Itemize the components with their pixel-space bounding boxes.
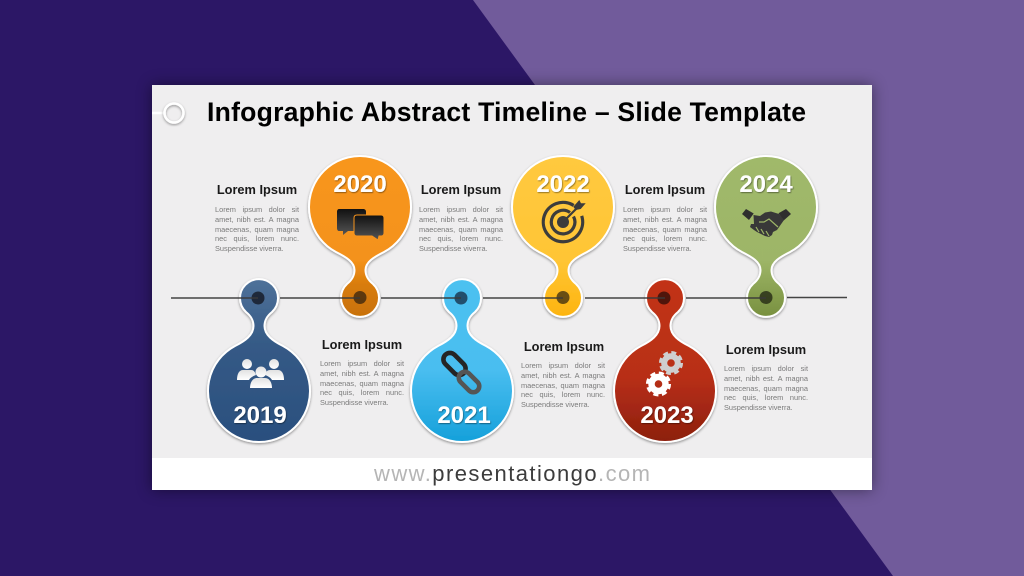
text block: 2020: maecenas, quam magna — [215, 225, 299, 234]
icon: target — [543, 200, 586, 242]
text block: 2022: amet, nibh est. A magna — [419, 215, 503, 224]
text block: 2024: nec quis, lorem nunc. — [623, 234, 707, 243]
text block: 2020: Lorem ipsum dolor sit — [215, 205, 299, 214]
year label: 2019 — [233, 402, 287, 429]
icon: handshake — [742, 209, 791, 237]
text block: 2019: amet, nibh est. A magna — [320, 369, 404, 378]
text block: 2024: Suspendisse viverra. — [623, 244, 692, 253]
text block: 2022: maecenas, quam magna — [419, 225, 503, 234]
text block: 2020: Suspendisse viverra. — [215, 244, 284, 253]
text block: 2022 — [419, 205, 503, 253]
milestone 2023 — [614, 279, 716, 442]
year label: 2024 — [739, 171, 793, 198]
text block: 2022: nec quis, lorem nunc. — [419, 234, 503, 243]
text block: 2024: amet, nibh est. A magna — [623, 215, 707, 224]
text block: 2023: Suspendisse viverra. — [724, 403, 793, 412]
milestone 2019 — [208, 279, 310, 442]
icon: people — [237, 359, 284, 388]
text block: 2019: Suspendisse viverra. — [320, 398, 389, 407]
heading: 2022 text: Lorem Ipsum — [421, 182, 501, 197]
milestone 2021 — [411, 279, 513, 442]
text block: 2020 — [215, 205, 299, 253]
text block: 2019: Lorem ipsum dolor sit — [320, 359, 404, 368]
icon: speech bubbles — [337, 209, 384, 240]
text block: 2024 — [623, 205, 707, 253]
text block: 2023: amet, nibh est. A magna — [724, 374, 808, 383]
text block: 2021: Lorem ipsum dolor sit — [521, 361, 605, 370]
text block: 2019: nec quis, lorem nunc. — [320, 388, 404, 397]
title: Infographic Abstract Timeline – Slide Template — [207, 97, 806, 127]
text block: 2023 — [724, 364, 808, 412]
icon: gears — [648, 353, 681, 395]
heading: 2020 text: Lorem Ipsum — [217, 182, 297, 197]
text block: 2022: Lorem ipsum dolor sit — [419, 205, 503, 214]
text block: 2023: nec quis, lorem nunc. — [724, 393, 808, 402]
text block: 2021: Suspendisse viverra. — [521, 400, 590, 409]
heading: 2019 text: Lorem Ipsum — [322, 337, 402, 352]
heading: 2023 text: Lorem Ipsum — [726, 342, 806, 357]
text block: 2021: amet, nibh est. A magna — [521, 371, 605, 380]
pin ornament — [152, 104, 184, 122]
text block: 2019: maecenas, quam magna — [320, 379, 404, 388]
text block: 2020: nec quis, lorem nunc. — [215, 234, 299, 243]
year label: 2021 — [437, 402, 491, 429]
text block: 2024: maecenas, quam magna — [623, 225, 707, 234]
timeline line — [171, 296, 847, 299]
text block: 2023: Lorem ipsum dolor sit — [724, 364, 808, 373]
year label: 2023 — [640, 402, 694, 429]
text block: 2021: maecenas, quam magna — [521, 381, 605, 390]
text block: 2024: Lorem ipsum dolor sit — [623, 205, 707, 214]
text block: 2019 — [320, 359, 404, 407]
milestone 2022 — [512, 156, 614, 317]
milestone 2020 — [309, 156, 411, 317]
slide panel — [152, 85, 872, 490]
milestone 2024 — [715, 156, 817, 317]
heading: 2021 text: Lorem Ipsum — [524, 339, 604, 354]
footer url: www.presentationgo.com — [373, 461, 650, 486]
text block: 2021 — [521, 361, 605, 409]
year label: 2020 — [333, 171, 387, 198]
footer band — [152, 458, 872, 490]
text block: 2023: maecenas, quam magna — [724, 384, 808, 393]
text block: 2020: amet, nibh est. A magna — [215, 215, 299, 224]
text block: 2021: nec quis, lorem nunc. — [521, 390, 605, 399]
text block: 2022: Suspendisse viverra. — [419, 244, 488, 253]
icon: chain link — [441, 350, 482, 395]
year label: 2022 — [536, 171, 590, 198]
heading: 2024 text: Lorem Ipsum — [625, 182, 705, 197]
